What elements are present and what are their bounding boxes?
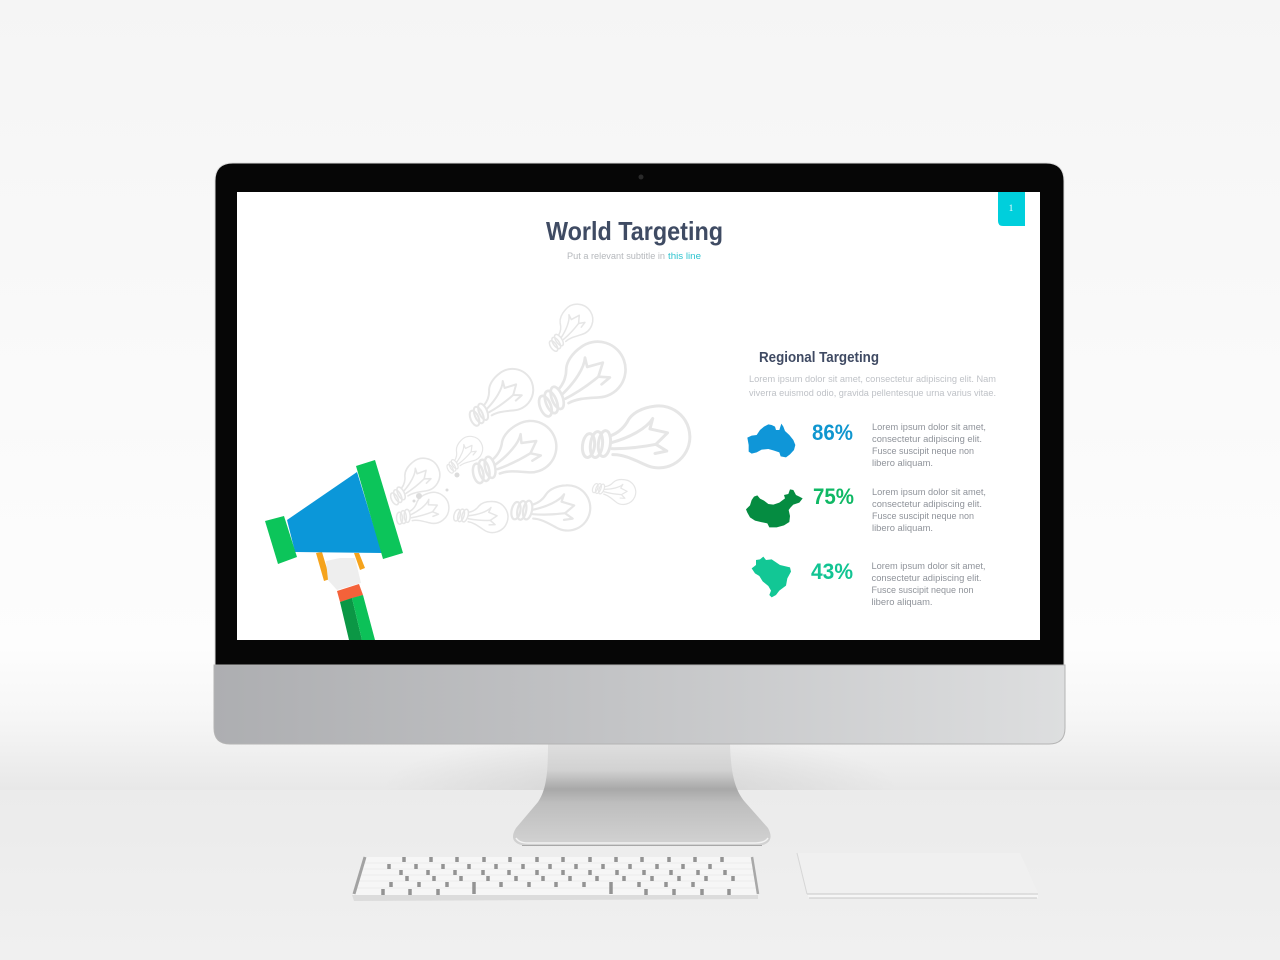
background: desk: [0, 790, 1280, 960]
description: Fusce suscipit neque non: [872, 585, 974, 596]
stat: 75%: 75%: [813, 484, 854, 509]
description: libero aliquam.: [872, 458, 933, 469]
description: libero aliquam.: [872, 523, 933, 534]
arm: [340, 598, 362, 640]
idea bulbs: [380, 298, 693, 534]
webcam: [638, 174, 644, 180]
title: World Targeting: [546, 216, 723, 246]
trackpad: [797, 853, 1038, 898]
keyboard row lines: [355, 863, 757, 888]
megaphone front rim: [356, 460, 403, 559]
intro paragraph: viverra euismod odio, gravida pellentesque urna varius vitae.: [749, 388, 996, 399]
keyboard: [352, 857, 758, 901]
row: brazil: [752, 557, 986, 608]
monitor chin: [214, 665, 1065, 744]
megaphone back cap: [265, 516, 297, 564]
description: Lorem ipsum dolor sit amet,: [872, 487, 986, 498]
row: china: [746, 484, 986, 534]
stat: 43%: 43%: [811, 559, 853, 584]
description: Fusce suscipit neque non: [872, 446, 974, 457]
map: brazil: [752, 557, 791, 597]
row: australia: [747, 420, 986, 469]
megaphone: [265, 460, 403, 640]
description: consectetur adipiscing elit.: [872, 573, 982, 584]
slide panel: [237, 192, 1040, 640]
trackpad lip: [807, 893, 1038, 898]
heading: regional targeting: Regional Targeting: [759, 349, 879, 366]
subtitle: this line: [668, 251, 701, 261]
description: [872, 487, 986, 534]
keyboard key gaps: [383, 857, 733, 895]
subtitle: Put a relevant subtitle in: [567, 251, 665, 261]
stat: 86%: 86%: [812, 420, 853, 445]
intro paragraph: Lorem ipsum dolor sit amet, consectetur adipiscing elit. Nam: [749, 374, 996, 385]
keyboard body: [353, 857, 758, 895]
description: consectetur adipiscing elit.: [872, 434, 982, 445]
description: Fusce suscipit neque non: [872, 511, 974, 522]
map: australia: [747, 424, 795, 457]
monitor stand: [513, 744, 771, 846]
hand: [326, 558, 361, 590]
trackpad surface: [797, 853, 1038, 894]
monitor: [214, 163, 1065, 744]
cuff: [337, 584, 363, 602]
description: consectetur adipiscing elit.: [872, 499, 982, 510]
slide background: [237, 192, 1040, 640]
page badge: [998, 192, 1025, 226]
description: Lorem ipsum dolor sit amet,: [872, 561, 986, 572]
megaphone struts: [316, 552, 330, 581]
description: [872, 561, 986, 608]
intro paragraph: [749, 374, 996, 399]
map: china: [746, 489, 803, 527]
shadow behind stand: [380, 730, 900, 850]
description: Lorem ipsum dolor sit amet,: [872, 422, 986, 433]
description: libero aliquam.: [872, 597, 932, 608]
page badge: 1: [1009, 203, 1013, 213]
megaphone cone: [287, 472, 382, 553]
monitor bezel: [215, 163, 1064, 666]
description: [872, 422, 986, 469]
